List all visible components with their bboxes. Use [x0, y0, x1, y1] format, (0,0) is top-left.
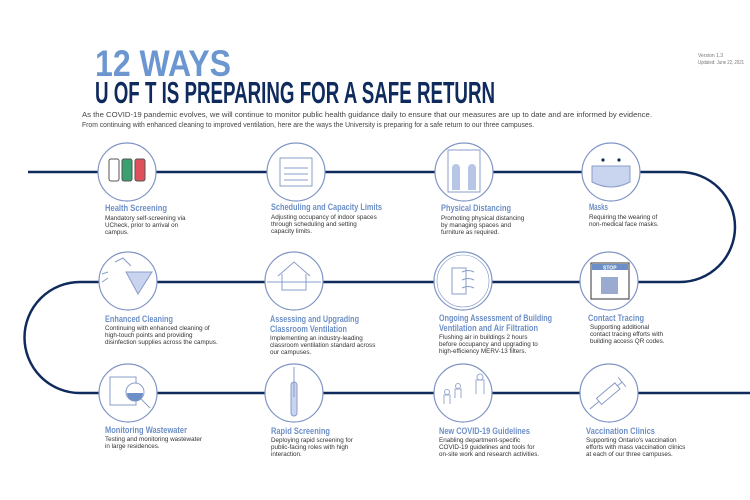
item: air filtration: Ongoing Assessment of Building — [439, 313, 552, 324]
title: main heading: U OF T IS PREPARING FOR A SAFE RETURN — [95, 75, 495, 110]
item: air filtration: high-efficiency MERV-13 filters. — [439, 348, 527, 355]
item: ventilation: classroom ventilation standard across — [270, 342, 375, 349]
item: guidelines: COVID-19 guidelines and tools for — [439, 444, 535, 451]
item: wastewater — [99, 364, 202, 450]
item: enhanced cleaning: Continuing with enhanced cleaning of — [105, 325, 210, 332]
item: masks — [582, 143, 659, 228]
item: contact tracing: STOP — [603, 266, 617, 272]
item: rapid screening: Rapid Screening — [271, 426, 330, 437]
intro text — [82, 112, 652, 129]
item: health screening — [98, 143, 186, 236]
item: contact tracing: Supporting additional — [590, 324, 649, 331]
item: guidelines: on-site work and research activities. — [439, 451, 539, 458]
item: enhanced cleaning — [99, 252, 218, 346]
item: rapid screening: Deploying rapid screening for — [271, 437, 353, 444]
version note: Version 1.3 — [698, 53, 723, 59]
item: wastewater: in large residences. — [105, 443, 160, 450]
version note — [698, 53, 744, 66]
item: guidelines: Enabling department-specific — [439, 437, 520, 444]
item: vaccination: at each of our three campuses. — [586, 451, 673, 458]
item: health screening: UCheck, prior to arrival on — [105, 222, 179, 229]
item: enhanced cleaning: Enhanced Cleaning — [105, 314, 173, 325]
item: health screening: Health Screening — [105, 203, 167, 214]
item: rapid screening: public-facing roles with high — [271, 444, 349, 451]
item: contact tracing: contact tracing efforts with — [590, 331, 664, 338]
item: enhanced cleaning: high-touch points and providing — [105, 332, 193, 339]
item: masks: Masks — [589, 202, 608, 213]
item: vaccination: efforts with mass vaccination clinics — [586, 444, 685, 451]
item: health screening: Mandatory self-screening via — [105, 215, 186, 222]
item: scheduling: Scheduling and Capacity Limits — [271, 202, 382, 213]
item: ventilation: our campuses. — [270, 349, 312, 356]
item: air filtration — [434, 252, 552, 355]
item: scheduling: Adjusting occupancy of indoor spaces — [271, 214, 377, 221]
intro text: As the COVID-19 pandemic evolves, we will continue to monitor public health guidance daily to ensure that our measures are up to date and are informed by evidence. — [82, 112, 652, 119]
intro text: From continuing with enhanced cleaning to improved ventilation, here are the ways the University is preparing for a safe return to our three campuses. — [82, 122, 534, 129]
item: ventilation: Classroom Ventilation — [270, 324, 347, 335]
item: contact tracing — [580, 252, 665, 345]
item: scheduling: capacity limits. — [271, 228, 312, 235]
item: contact tracing: Contact Tracing — [588, 313, 644, 324]
item: ventilation: Implementing an industry-leading — [270, 335, 363, 342]
item: air filtration: Ventilation and Air Filtration — [439, 323, 538, 334]
title: 12 ways: 12 WAYS — [95, 43, 231, 84]
item: physical distancing — [435, 143, 525, 236]
item: physical distancing: furniture as required. — [441, 229, 499, 236]
item: physical distancing: by managing spaces and — [441, 222, 512, 229]
item: ventilation: Assessing and Upgrading — [270, 314, 359, 325]
item: physical distancing: Physical Distancing — [441, 203, 511, 214]
item: air filtration: Flushing air in buildings 2 hours — [439, 334, 528, 341]
item: vaccination: Supporting Ontario's vaccination — [586, 437, 677, 444]
item: air filtration: before occupancy and upgrading to — [439, 341, 538, 348]
item: scheduling — [267, 143, 382, 235]
item: health screening: campus. — [105, 229, 129, 236]
item: physical distancing: Promoting physical distancing — [441, 215, 525, 222]
item: rapid screening: interaction. — [271, 451, 302, 458]
item: guidelines — [434, 364, 539, 458]
item: masks: Requiring the wearing of — [589, 214, 658, 221]
item: masks: non-medical face masks. — [589, 221, 659, 228]
item: wastewater: Testing and monitoring wastewater — [105, 436, 202, 443]
version note: Updated: June 22, 2021 — [698, 60, 744, 66]
item: rapid screening — [265, 364, 353, 458]
item: guidelines: New COVID-19 Guidelines — [439, 426, 530, 437]
item: wastewater: Monitoring Wastewater — [105, 425, 187, 436]
item: ventilation — [265, 252, 375, 356]
item: vaccination: Vaccination Clinics — [586, 426, 655, 437]
timeline path — [25, 172, 750, 393]
item: vaccination — [580, 364, 685, 458]
item: contact tracing: building access QR codes. — [590, 338, 665, 345]
item: scheduling: through scheduling and setting — [271, 221, 357, 228]
item: enhanced cleaning: disinfection supplies across the campus. — [105, 339, 218, 346]
